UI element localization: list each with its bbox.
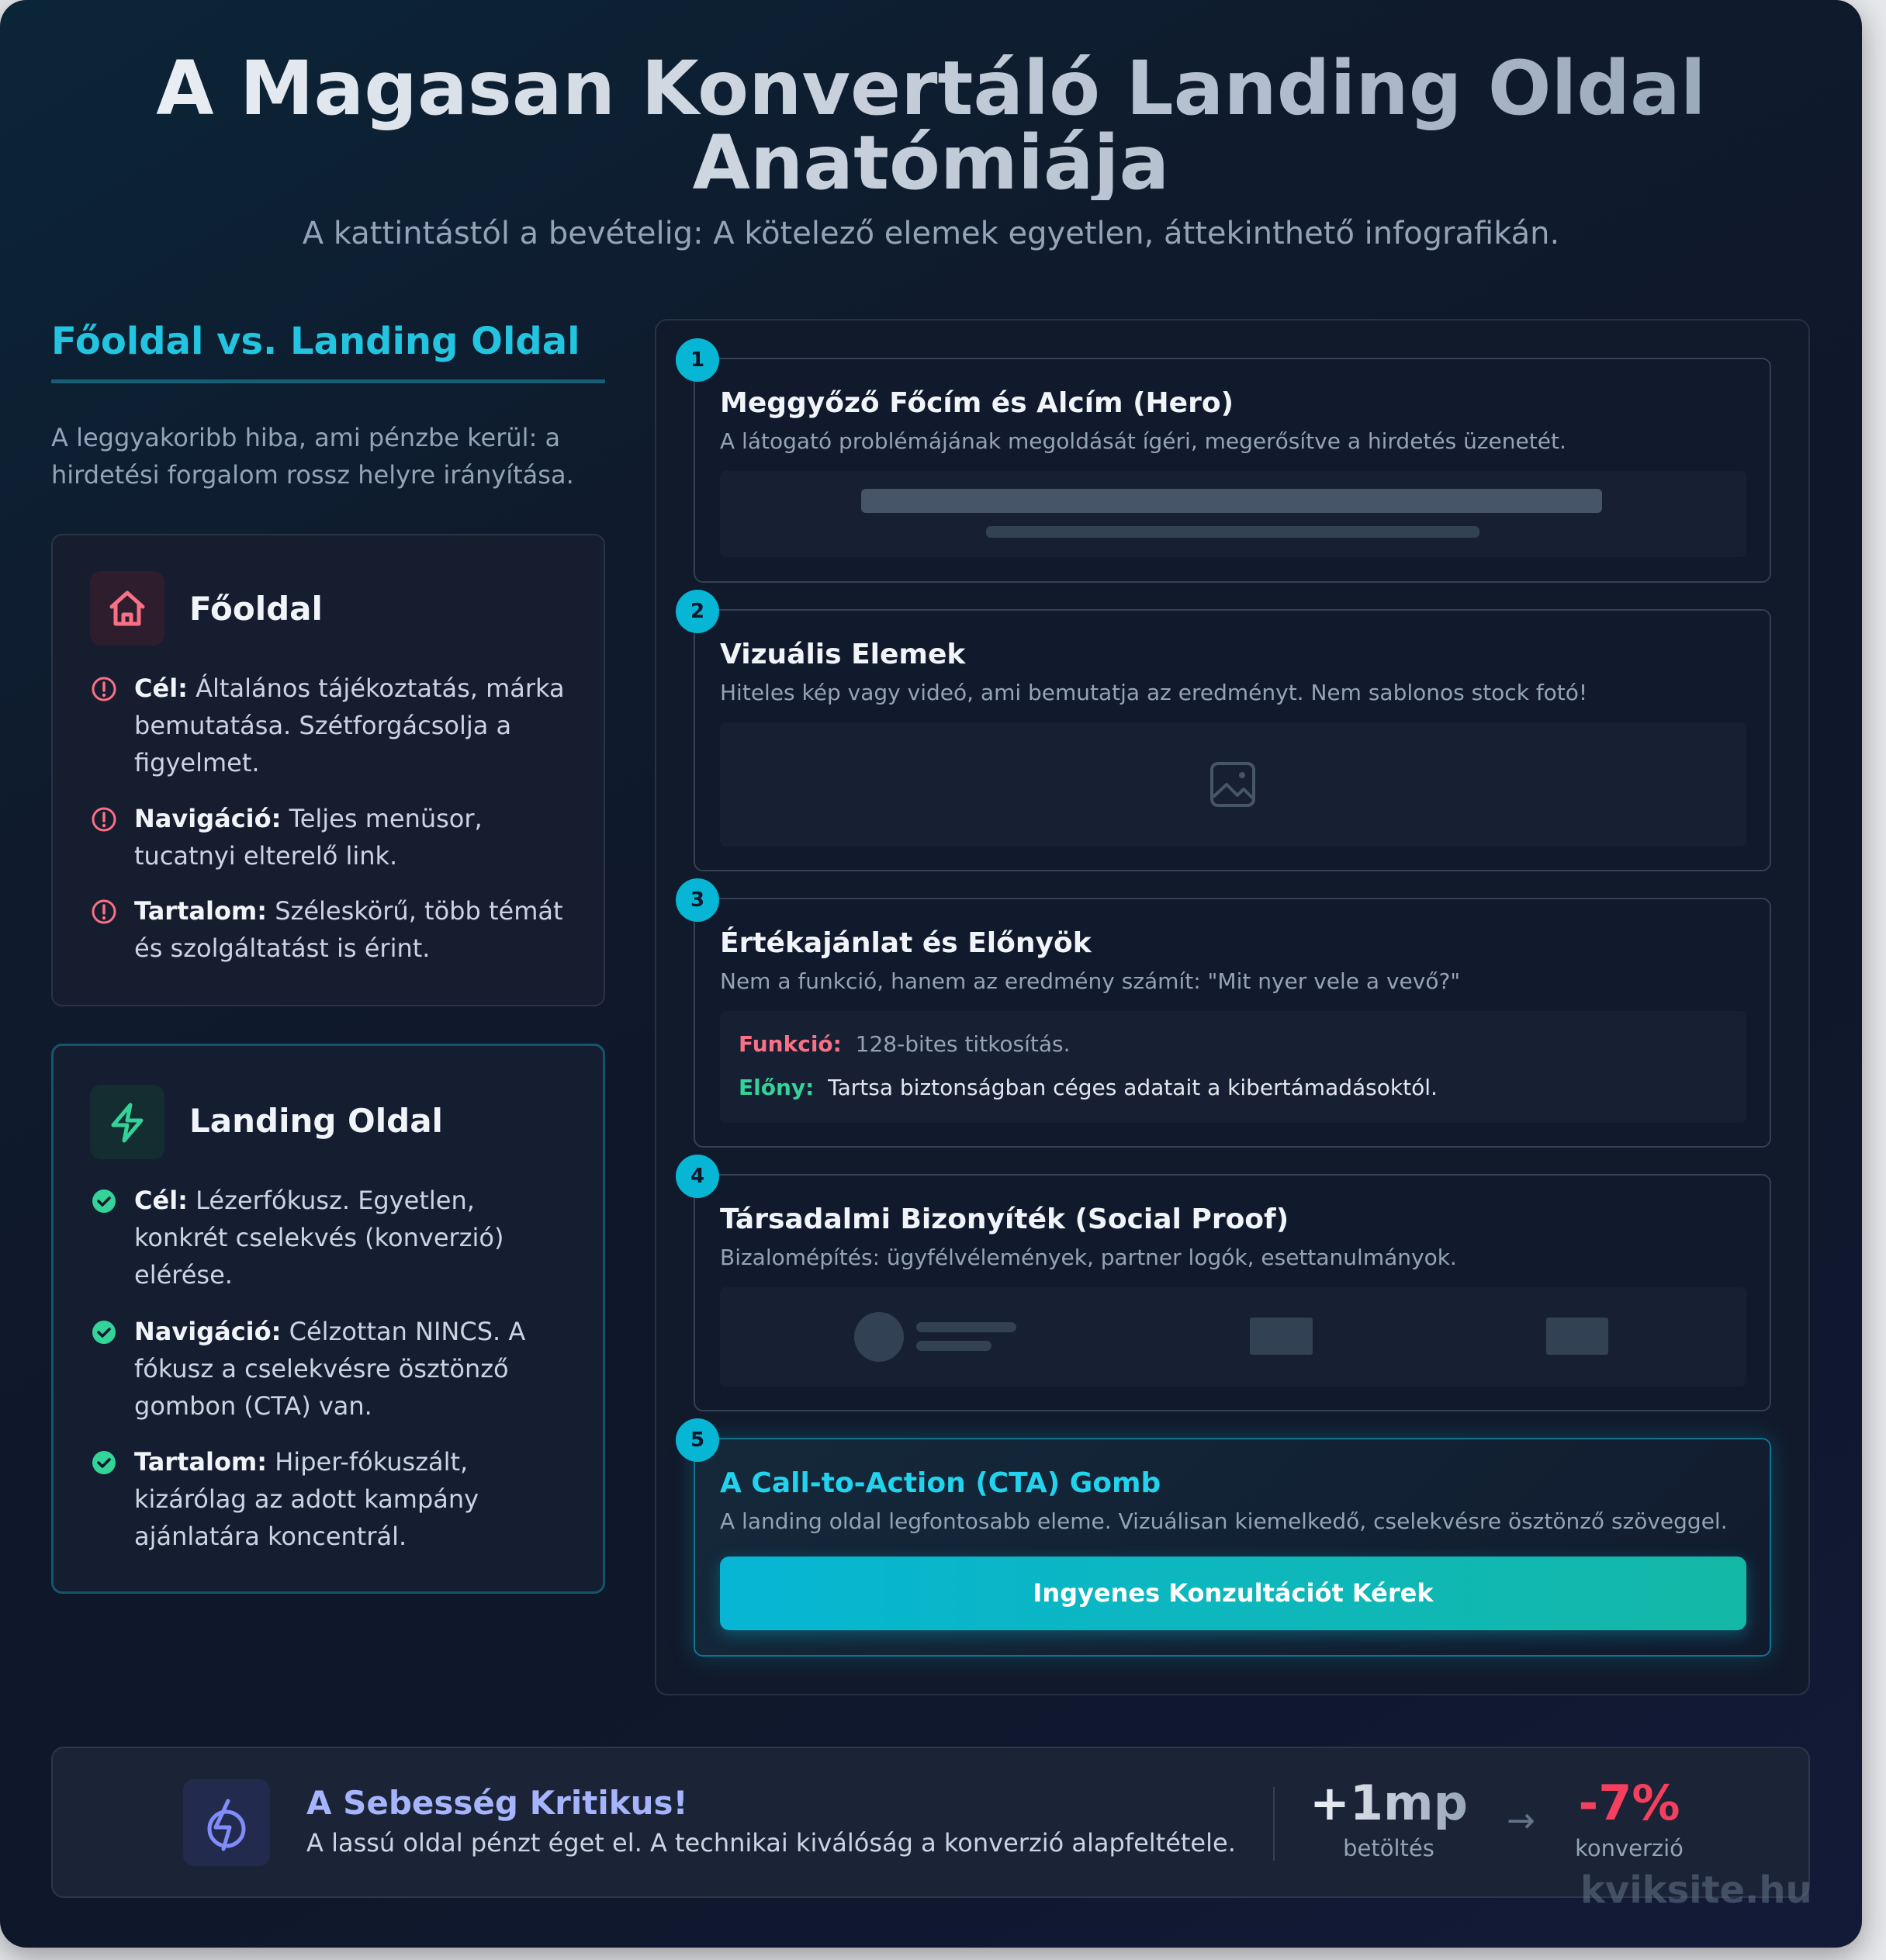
bottom panel: speed [51, 1747, 1810, 1898]
heading: Értékajánlat és Előnyök [720, 927, 1092, 959]
feature vs benefit box [720, 1011, 1746, 1123]
item: cél: Cél: Általános tájékoztatás, márka [134, 674, 565, 703]
panel: right anatomy [655, 319, 1810, 1695]
left heading: Főoldal vs. Landing Oldal [51, 320, 580, 363]
icon: speed [183, 1779, 270, 1866]
panel: Landing Oldal [51, 1044, 605, 1594]
feature vs benefit box: Funkció: 128-bites titkosítás. [739, 1031, 1071, 1057]
badge 5: 5 [690, 1428, 704, 1452]
card 2: visuals [694, 609, 1771, 871]
item: cél: konkrét cselekvés (konverzió) [134, 1223, 504, 1252]
item: navigáció: gombon (CTA) van. [134, 1391, 372, 1421]
card 3: value proposition [694, 898, 1771, 1148]
heading: Főoldal: Főoldal [189, 590, 323, 628]
arrow: → [1507, 1801, 1535, 1841]
stat: -7%: -7% [1578, 1775, 1680, 1831]
title [0, 51, 1862, 200]
heading: A Call-to-Action (CTA) Gomb [720, 1467, 1161, 1499]
item: navigáció [92, 1317, 525, 1421]
badge 2: 2 [690, 600, 704, 623]
description: A látogató problémájának megoldását ígéri, megerősítve a hirdetés üzenetét. [720, 428, 1566, 454]
badge 1: 1 [690, 348, 704, 372]
mockup: testimonial and logos [720, 1287, 1746, 1387]
card 1: hero [694, 358, 1771, 583]
badge 3: 3 [690, 888, 704, 912]
watermark: kviksite.hu [1580, 1868, 1812, 1912]
CTA button: Ingyenes Konzultációt Kérek [1033, 1578, 1434, 1608]
divider [1273, 1787, 1275, 1861]
badge 3 [676, 878, 719, 922]
item: tartalom: kizárólag az adott kampány [134, 1484, 479, 1514]
title: Anatómiája [693, 119, 1169, 206]
badge 1 [676, 338, 719, 382]
stat: +1mp: +1mp [1310, 1775, 1468, 1831]
badge 5 [676, 1418, 719, 1462]
title: A Magasan Konvertáló Landing Oldal [156, 45, 1706, 132]
description: Hiteles kép vagy videó, ami bemutatja az eredményt. Nem sablonos stock fotó! [720, 680, 1587, 705]
left heading [51, 320, 605, 383]
item: tartalom: Tartalom: Hiper-fókuszált, [134, 1447, 468, 1477]
item: navigáció: Navigáció: Célzottan NINCS. A [134, 1317, 525, 1346]
intro text: A leggyakoribb hiba, ami pénzbe kerül: a [51, 423, 560, 452]
card 5: CTA [694, 1438, 1771, 1657]
item: tartalom [92, 1447, 479, 1551]
stat: +1mp: betöltés [1343, 1835, 1434, 1861]
subtitle: A kattintástól a bevételig: A kötelező elemek egyetlen, áttekinthető infografikán. [303, 216, 1559, 251]
badge 2 [676, 590, 719, 633]
item: navigáció: tucatnyi elterelő link. [134, 841, 397, 871]
heading: A Sebesség Kritikus! [306, 1784, 688, 1822]
intro text: hirdetési forgalom rossz helyre irányítása. [51, 460, 574, 490]
stat: +1mp [1310, 1775, 1468, 1861]
description: A lassú oldal pénzt éget el. A technikai kiválóság a konverzió alapfeltétele. [306, 1828, 1236, 1858]
icon: house [90, 571, 164, 646]
stat: -7% [1575, 1775, 1684, 1861]
item: navigáció: fókusz a cselekvésre ösztönző [134, 1354, 509, 1383]
item: cél [92, 674, 565, 777]
heading: Meggyőző Főcím és Alcím (Hero) [720, 387, 1234, 419]
feature vs benefit box: Előny: Tartsa biztonságban céges adatait a kibertámadásoktól. [739, 1075, 1438, 1100]
description: A landing oldal legfontosabb eleme. Vizuálisan kiemelkedő, cselekvésre ösztönző szöveggel. [720, 1508, 1728, 1534]
item: navigáció: Navigáció: Teljes menüsor, [134, 804, 483, 833]
CTA button [720, 1557, 1746, 1630]
heading: Társadalmi Bizonyíték (Social Proof) [720, 1203, 1289, 1235]
mockup: hero bars [720, 471, 1746, 557]
item: tartalom: és szolgáltatást is érint. [134, 933, 430, 963]
item: cél: elérése. [134, 1260, 233, 1290]
heading: Vizuális Elemek [720, 639, 965, 670]
card 4: social proof [694, 1174, 1771, 1411]
item: tartalom: Tartalom: Széleskörű, több témát [134, 896, 563, 926]
description: Bizalomépítés: ügyfélvélemények, partner logók, esettanulmányok. [720, 1245, 1457, 1270]
item: tartalom: ajánlatára koncentrál. [134, 1522, 407, 1551]
heading: Landing Oldal: Landing Oldal [189, 1102, 443, 1140]
mockup: image placeholder [720, 722, 1746, 847]
item: cél [92, 1186, 504, 1290]
item: cél: Cél: Lézerfókusz. Egyetlen, [134, 1186, 475, 1215]
badge 4 [676, 1155, 719, 1198]
item: tartalom [92, 896, 563, 963]
item: cél: bemutatása. Szétforgácsolja a [134, 711, 511, 740]
icon: image [1210, 762, 1255, 807]
icon: bolt [90, 1085, 164, 1159]
item: cél: figyelmet. [134, 748, 260, 777]
item: navigáció [92, 804, 483, 871]
panel: Főoldal [51, 534, 605, 1006]
intro text [51, 423, 574, 490]
stat: -7%: konverzió [1575, 1835, 1684, 1861]
badge 4: 4 [690, 1165, 704, 1188]
description: Nem a funkció, hanem az eredmény számít: "Mit nyer vele a vevő?" [720, 968, 1460, 994]
